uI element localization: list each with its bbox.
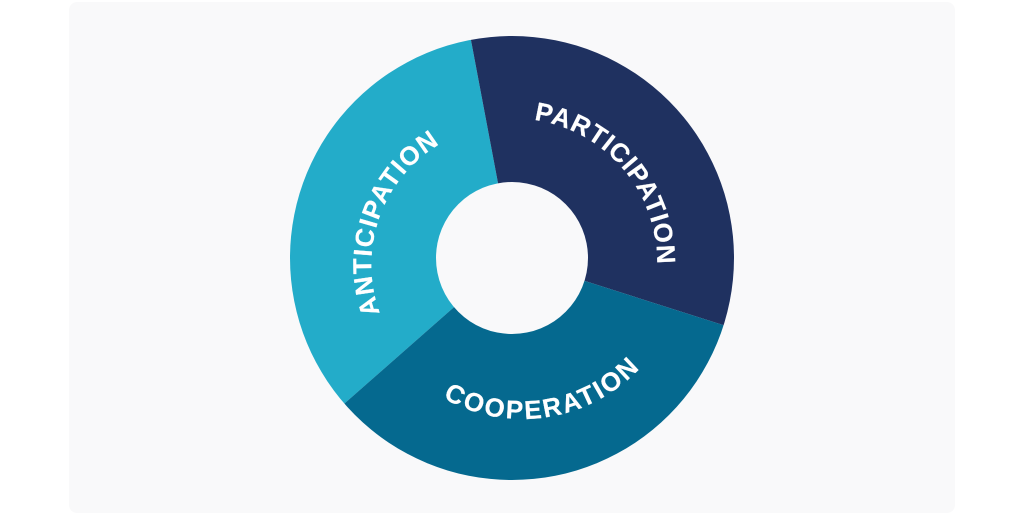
segment: cooperation: [344, 280, 724, 480]
segment: participation: [471, 36, 734, 326]
label: anticipation: ANTICIPATION: [353, 130, 438, 313]
donut diagram panel: [290, 36, 734, 480]
label: cooperation: COOPERATION: [446, 356, 639, 420]
donut hole: [436, 182, 588, 334]
label: participation: PARTICIPATION: [536, 102, 676, 262]
